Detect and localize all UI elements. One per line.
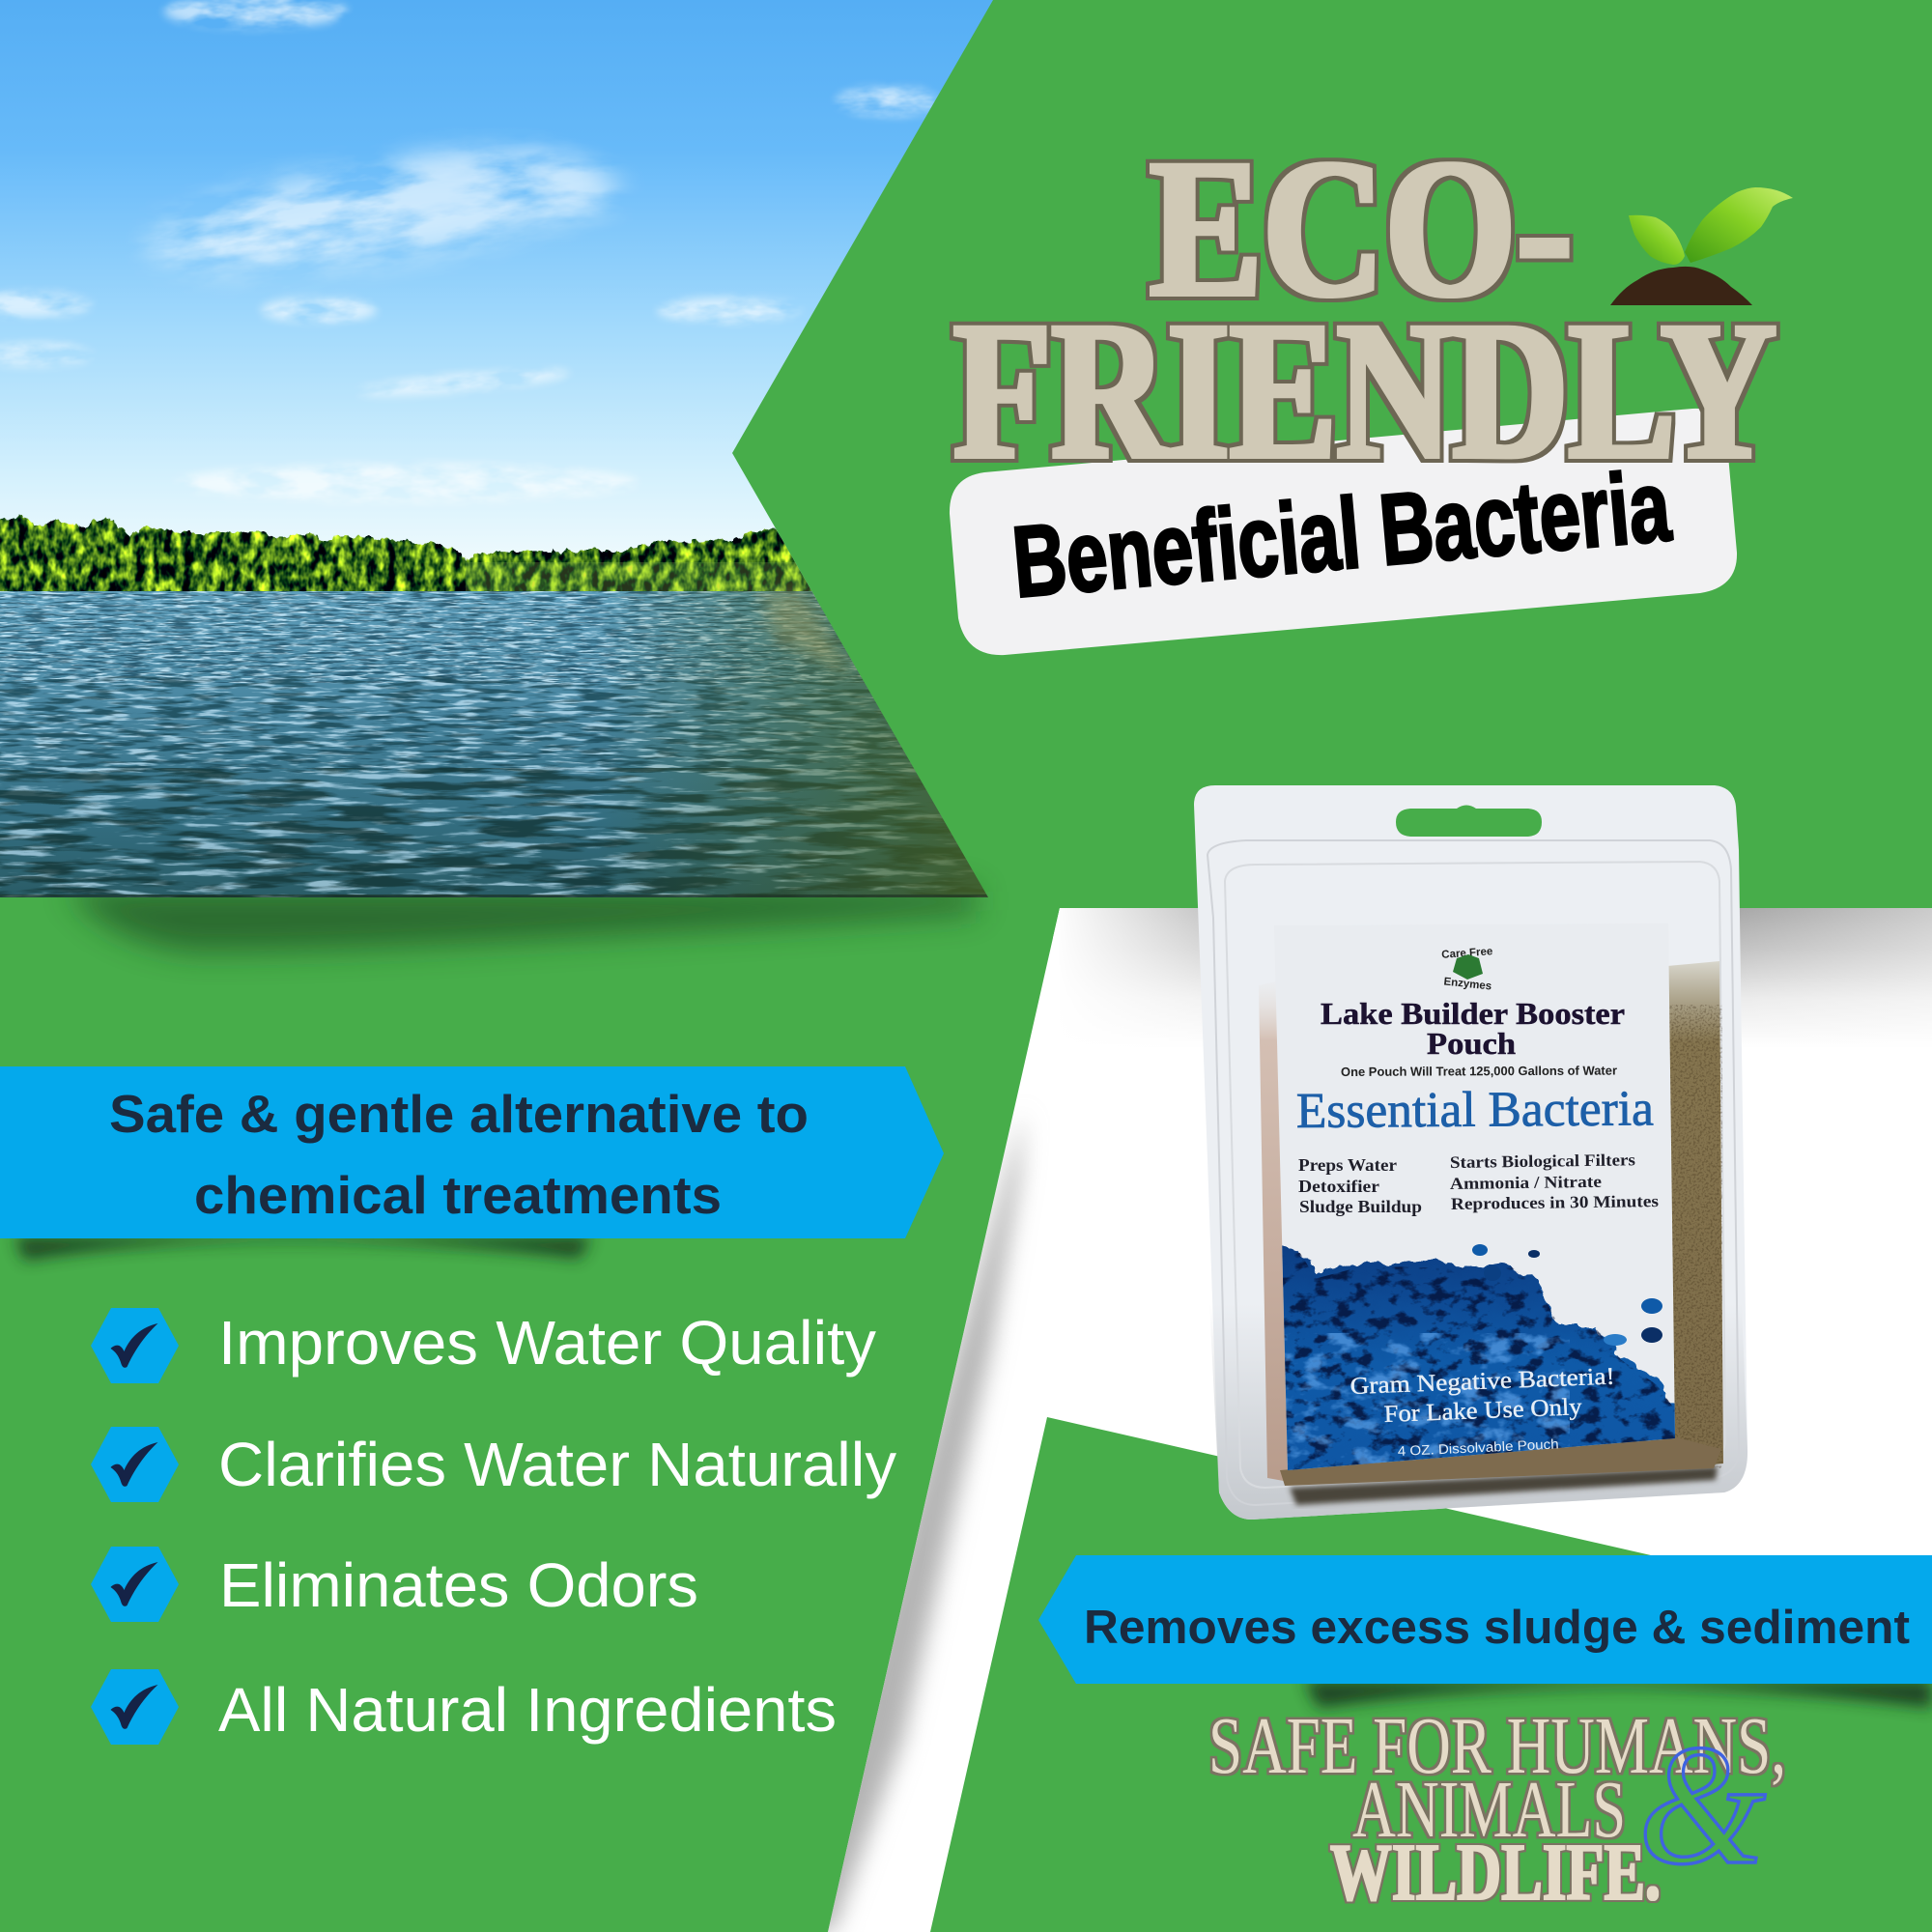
label list left (1298, 1155, 1422, 1216)
label heading (1321, 996, 1625, 1061)
dark base band (1290, 1466, 1718, 1505)
logo (1441, 946, 1493, 993)
item: Clarifies Water Naturally: Clarifies Water Naturally (218, 1430, 896, 1499)
blister bottom tint (1209, 1304, 1747, 1520)
tree line (0, 515, 821, 595)
left banner shadow (14, 1236, 591, 1261)
hanging hole (1396, 806, 1542, 837)
item: Eliminates Odors: Eliminates Odors (219, 1550, 698, 1620)
distant trees haze (466, 562, 823, 591)
right banner (1038, 1555, 1932, 1684)
safe for humans, animals and wildlife: WILDLIFE. (1330, 1828, 1661, 1918)
label list right: Ammonia / Nitrate (1450, 1172, 1602, 1193)
water splash (1282, 1244, 1675, 1470)
right banner: Removes excess sludge & sediment (1084, 1602, 1910, 1654)
clouds (0, 0, 942, 502)
left banner: Safe & gentle alternative to (109, 1084, 809, 1144)
label title: Essential Bacteria (1296, 1081, 1654, 1139)
sand strip bottom (1280, 1437, 1721, 1486)
shadows on white panel (792, 908, 1932, 1932)
label list right: Reproduces in 30 Minutes (1451, 1191, 1659, 1213)
card and blister (1194, 785, 1747, 1520)
sand strip right (1667, 961, 1723, 1468)
left banner (0, 1066, 944, 1238)
label list right: Starts Biological Filters (1450, 1150, 1635, 1172)
icon: sprout (1610, 187, 1793, 305)
label heading: Lake Builder Booster (1321, 996, 1625, 1031)
item: Improves Water Quality: Improves Water Quality (218, 1308, 876, 1378)
safe for humans, animals and wildlife: ANIMALS (1352, 1765, 1626, 1855)
ampersand: & (1638, 1709, 1766, 1900)
label list left: Preps Water (1298, 1155, 1397, 1175)
word: ECO-: ECO- (1150, 119, 1573, 338)
sky (0, 0, 995, 599)
lake photo panel (0, 0, 995, 898)
label list left: Detoxifier (1298, 1177, 1379, 1196)
label subheading: One Pouch Will Treat 125,000 Gallons of Water (1341, 1064, 1617, 1079)
label footer: Gram Negative Bacteria! (1350, 1363, 1615, 1400)
tag: Beneficial Bacteria: Beneficial Bacteria (1009, 450, 1675, 619)
tag: Beneficial Bacteria (950, 409, 1737, 655)
logo: Enzymes (1443, 976, 1492, 993)
label list left: Sludge Buildup (1299, 1197, 1422, 1216)
photo drop shadow (68, 889, 976, 952)
right banner shadow (1304, 1681, 1932, 1708)
label list right (1450, 1150, 1659, 1213)
checklist (91, 1308, 896, 1745)
product: blister pack (1194, 785, 1747, 1520)
white diagonal panel (828, 908, 1932, 1932)
safe for humans, animals and wildlife (1208, 1701, 1786, 1918)
left banner: chemical treatments (194, 1165, 722, 1225)
title: ECO-FRIENDLY (950, 119, 1776, 655)
blister edges (1208, 840, 1739, 1505)
label footer: For Lake Use Only (1383, 1394, 1583, 1428)
item: All Natural Ingredients: All Natural Ingredients (218, 1675, 837, 1745)
lake water (0, 591, 995, 898)
label footer (1350, 1363, 1615, 1459)
sand strip left (1259, 980, 1294, 1483)
product label (1273, 923, 1686, 1483)
logo: Care Free (1441, 946, 1493, 961)
label heading: Pouch (1427, 1026, 1516, 1061)
label footer: 4 OZ. Dissolvable Pouch (1397, 1435, 1559, 1459)
